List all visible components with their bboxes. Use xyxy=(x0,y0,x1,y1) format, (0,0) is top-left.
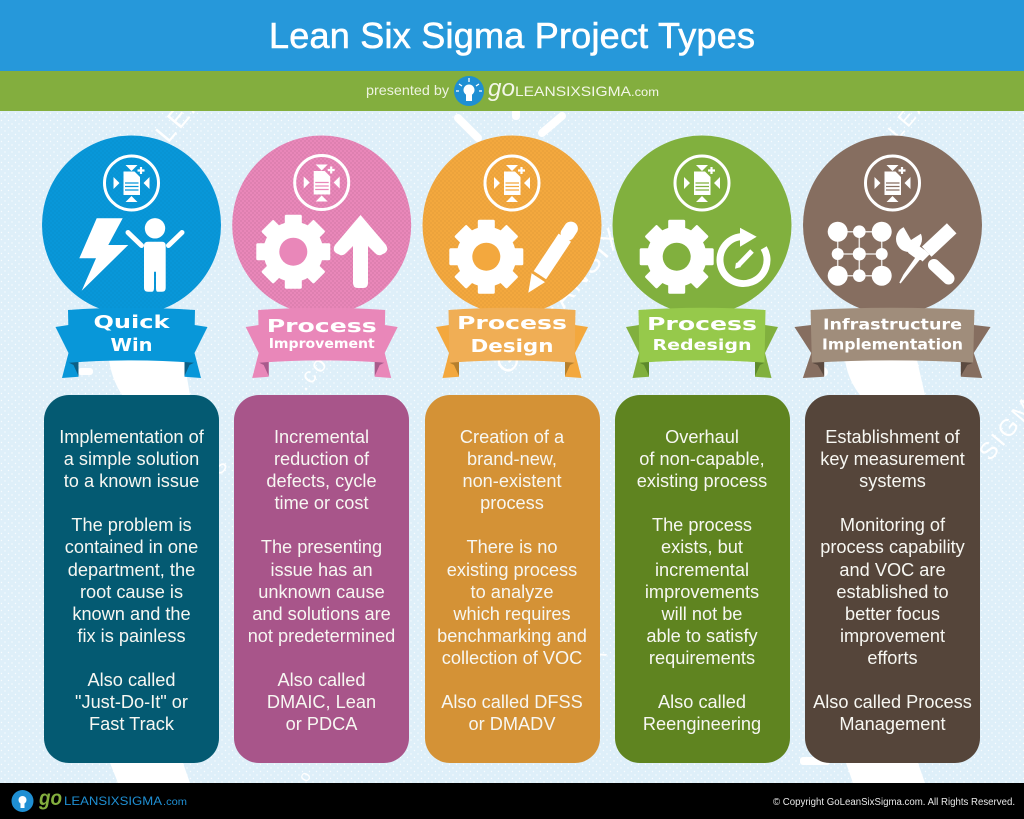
ribbon: Quick Win xyxy=(56,308,208,378)
panel: Process Design description: collection of VOC xyxy=(442,648,582,668)
ribbon: Infrastructure Implementation: Implementation xyxy=(822,336,963,354)
panel: Process Improvement description: DMAIC, Lean xyxy=(267,692,376,712)
panel: Infrastructure Implementation description: Also called Process xyxy=(813,692,972,712)
panel: Infrastructure Implementation description: Establishment of xyxy=(825,427,960,447)
panel: Process Design description: Also called DFSS xyxy=(441,692,583,712)
footer bar xyxy=(0,783,1024,819)
panel: Process Redesign description: will not be xyxy=(662,604,742,624)
panel: Process Redesign description: improvements xyxy=(645,582,759,602)
background watermark and faint lightbulbs: LEAN xyxy=(150,65,226,148)
panel: Infrastructure Implementation description: key measurement xyxy=(820,449,965,469)
icon: up arrow xyxy=(334,215,387,288)
panel: Process Redesign description: of non-capable, xyxy=(639,449,765,469)
column 1: Quick Win badge xyxy=(42,136,221,378)
background watermark and faint lightbulbs: o xyxy=(296,766,316,785)
panel: Process Redesign description: incremental xyxy=(655,560,749,580)
icon: lightning bolt xyxy=(79,218,128,291)
column 2: Process Improvement badge xyxy=(232,136,411,378)
panel: Infrastructure Implementation description: Management xyxy=(839,714,946,734)
panel: Quick Win description: root cause is xyxy=(80,582,183,602)
column 3: Process Design badge xyxy=(422,136,602,378)
panel: Process Improvement description: not predetermined xyxy=(248,626,395,646)
background watermark and faint lightbulbs: GOLEANSIXSIGMA xyxy=(490,142,696,380)
panel: Process Improvement description: or PDCA xyxy=(286,714,357,734)
ribbon: Process Design xyxy=(436,308,588,378)
title: Lean Six Sigma Project Types xyxy=(269,15,755,56)
panel: Process Improvement description: and solutions are xyxy=(252,604,391,624)
panel: Process Design description: process xyxy=(480,493,544,513)
icon: logo lightbulb xyxy=(454,76,484,106)
icon: person with raised arms xyxy=(128,218,182,292)
panel: Quick Win description: Fast Track xyxy=(89,714,174,734)
ribbon: Process Design: Process xyxy=(457,313,567,334)
panel: Quick Win description: known and the xyxy=(72,604,191,624)
panel: Process Design description: non-existent xyxy=(462,471,562,491)
icon: network grid xyxy=(828,222,892,286)
ribbon: Infrastructure Implementation xyxy=(794,308,991,378)
panel: Quick Win description: The problem is xyxy=(71,515,192,535)
panel: Quick Win description xyxy=(44,395,219,763)
panel: Quick Win description: "Just-Do-It" or xyxy=(75,692,188,712)
panel: Infrastructure Implementation description: and VOC are xyxy=(839,560,946,580)
panel: Process Design description: existing process xyxy=(447,560,577,580)
background watermark and faint lightbulbs: LEA xyxy=(883,88,934,143)
title banner xyxy=(0,0,1024,71)
panel: Infrastructure Implementation description: improvement xyxy=(840,626,945,646)
copyright: © Copyright GoLeanSixSigma.com. All Rights Reserved. xyxy=(773,797,1015,808)
panel: Process Redesign description xyxy=(614,395,790,763)
panel: Process Improvement description: Incremental xyxy=(274,427,369,447)
ribbon: Infrastructure Implementation: Infrastructure xyxy=(823,316,962,334)
background watermark and faint lightbulbs: S xyxy=(207,453,234,479)
panel: Infrastructure Implementation description: process capability xyxy=(820,537,965,557)
panel: Quick Win description: contained in one xyxy=(65,537,198,557)
icon: pencil xyxy=(528,229,571,293)
footer bar: LEANSIXSIGMA xyxy=(64,794,162,808)
panel: Process Design description: Creation of a xyxy=(460,427,564,447)
panel: Infrastructure Implementation description: established to xyxy=(836,582,949,602)
panel: Quick Win description: to a known issue xyxy=(64,471,199,491)
presented by banner xyxy=(0,71,1024,111)
icon: project document hub xyxy=(675,156,729,210)
panel: Process Improvement description: time or cost xyxy=(274,493,368,513)
panel: Process Redesign description: requirements xyxy=(649,648,755,668)
panel: Process Design description: which requires xyxy=(453,604,571,624)
presented by banner: .com xyxy=(631,85,659,99)
presented by label: presented by xyxy=(366,82,449,98)
panel: Quick Win description: Implementation of xyxy=(59,427,204,447)
panel: Process Design description: or DMADV xyxy=(469,714,555,734)
panel: Process Design description: brand-new, xyxy=(467,449,557,469)
icon: gear xyxy=(449,220,523,294)
logo wordmark: go xyxy=(488,75,515,102)
panel: Process Redesign description: exists, but xyxy=(661,537,743,557)
panel: Process Redesign description: Also called xyxy=(658,692,746,712)
panel: Process Improvement description: defects, cycle xyxy=(266,471,377,491)
footer bar: .com xyxy=(163,796,187,808)
background watermark and faint lightbulbs: X xyxy=(583,639,613,668)
column 4: Process Redesign badge xyxy=(612,136,792,378)
panel: Quick Win description: Also called xyxy=(88,670,175,690)
badge circle xyxy=(803,136,982,314)
badge circle xyxy=(422,136,602,314)
panel: Process Design description: to analyze xyxy=(471,582,553,602)
icon: footer logo lightbulb xyxy=(12,790,34,812)
panel: Process Design description: There is no xyxy=(466,537,557,557)
panel: Process Redesign description: able to satisfy xyxy=(646,626,758,646)
footer logo wordmark: go xyxy=(38,787,62,810)
panel: Quick Win description: a simple solution xyxy=(64,449,199,469)
presented by banner: LEANSIXSIGMA xyxy=(515,83,632,99)
ribbon: Quick Win: Win xyxy=(110,335,153,356)
icon: project document hub xyxy=(485,156,539,210)
panel: Process Improvement description: unknown cause xyxy=(258,582,385,602)
panel: Infrastructure Implementation description: Monitoring of xyxy=(840,515,945,535)
panel: Process Improvement description: reduction of xyxy=(274,449,369,469)
panel: Infrastructure Implementation description xyxy=(805,395,980,763)
badge circle xyxy=(612,136,792,314)
panel: Process Design description: benchmarking and xyxy=(437,626,587,646)
panel: Process Redesign description: existing process xyxy=(637,471,767,491)
panel: Process Improvement description: issue has an xyxy=(270,560,373,580)
panel: Infrastructure Implementation description: systems xyxy=(859,471,926,491)
panel: Process Improvement description: Also called xyxy=(278,670,365,690)
panel: Process Design description xyxy=(424,395,600,763)
ribbon: Process Improvement: Process xyxy=(267,316,377,337)
icon: project document hub xyxy=(104,156,158,210)
ribbon: Process Improvement xyxy=(246,308,398,378)
background watermark and faint lightbulbs: .com xyxy=(290,333,347,395)
panel: Quick Win description: fix is painless xyxy=(77,626,186,646)
ribbon: Process Redesign: Redesign xyxy=(652,336,752,354)
icon: refresh arrow with pencil xyxy=(720,228,767,283)
column 5: Infrastructure Implementation badge xyxy=(794,136,991,378)
panel: Process Redesign description: The process xyxy=(652,515,752,535)
ribbon: Process Redesign: Process xyxy=(647,314,757,335)
panel: Quick Win description: department, the xyxy=(68,560,195,580)
ribbon: Quick Win: Quick xyxy=(94,312,171,333)
ribbon: Process Redesign xyxy=(626,308,778,378)
panel: Process Improvement description: The presenting xyxy=(261,537,382,557)
panel: Infrastructure Implementation description: efforts xyxy=(867,648,918,668)
icon: project document hub xyxy=(866,156,920,210)
badge circle xyxy=(42,136,221,314)
icon: project document hub xyxy=(295,156,349,210)
panel: Process Improvement description xyxy=(234,395,409,763)
ribbon: Process Design: Design xyxy=(471,336,553,357)
badge circle xyxy=(232,136,411,314)
ribbon: Process Improvement: Improvement xyxy=(269,337,375,352)
panel: Process Redesign description: Reengineering xyxy=(643,714,761,734)
icon: wrench and screwdriver xyxy=(896,224,952,283)
icon: gear xyxy=(256,215,330,289)
icon: gear xyxy=(640,220,714,294)
panel: Process Redesign description: Overhaul xyxy=(665,427,739,447)
panel: Infrastructure Implementation description: better focus xyxy=(845,604,940,624)
